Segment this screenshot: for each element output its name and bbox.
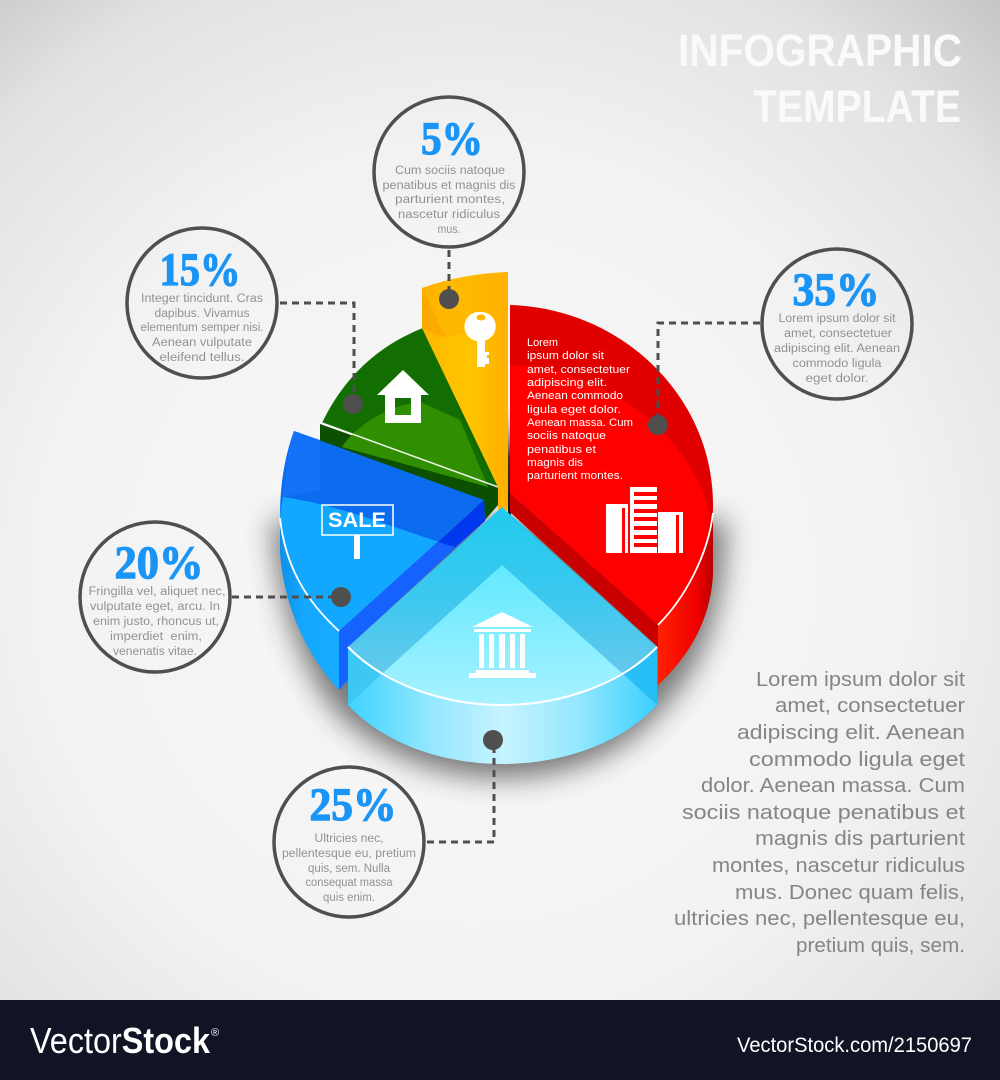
callout: 25%: pellentesque eu, pretium xyxy=(282,848,416,860)
icon: key xyxy=(464,312,496,367)
marker dots xyxy=(331,289,668,750)
red slice text: sociis natoque xyxy=(527,430,606,442)
callout: 5%: Cum sociis natoque xyxy=(395,165,505,177)
body text block: dolor. Aenean massa. Cum xyxy=(701,775,965,797)
title: INFOGRAPHIC xyxy=(678,25,962,76)
pie shadow xyxy=(272,520,726,778)
red slice text: magnis dis xyxy=(527,457,584,469)
icon: sale sign xyxy=(322,505,393,559)
title xyxy=(678,25,962,132)
callout: 15%: Aenean vulputate xyxy=(152,337,252,349)
callout: 5%: penatibus et magnis dis xyxy=(382,180,516,192)
callout: 35% xyxy=(762,249,912,399)
red slice text: ipsum dolor sit xyxy=(527,350,604,362)
callout: 25%: quis enim. xyxy=(323,892,375,904)
icon: buildings xyxy=(606,487,683,553)
body text block: adipiscing elit. Aenean xyxy=(737,722,965,744)
body text block: magnis dis parturient xyxy=(755,828,965,850)
callout: 20%: enim justo, rhoncus ut, xyxy=(93,616,219,628)
red slice text: adipiscing elit. xyxy=(527,377,607,389)
body text block: amet, consectetuer xyxy=(775,695,965,717)
icon: bank xyxy=(469,612,536,678)
callout: 20%: vulputate eget, arcu. In xyxy=(90,601,220,613)
slice: green 15% xyxy=(320,328,498,520)
callout: 25%: Ultricies nec, xyxy=(314,833,384,845)
callout: 15%: dapibus. Vivamus xyxy=(154,308,250,320)
slice: cyan 25% xyxy=(348,507,657,764)
callout: 5%: parturient montes, xyxy=(395,194,505,206)
callout: 15% xyxy=(127,228,277,378)
red slice text: Aenean commodo xyxy=(527,390,623,402)
callout: 25%: consequat massa xyxy=(306,877,393,889)
body text block: ultricies nec, pellentesque eu, xyxy=(674,908,965,930)
callout: 20%: venenatis vitae. xyxy=(113,646,197,658)
callout: 5% xyxy=(374,97,524,247)
callout: 5%: 5% xyxy=(421,113,483,165)
body text block: Lorem ipsum dolor sit xyxy=(756,669,965,691)
callout: 25%: 25% xyxy=(310,779,396,831)
body text block: montes, nascetur ridiculus xyxy=(712,855,965,877)
footer bar: VectorStock xyxy=(30,1020,211,1061)
callout: 15%: eleifend tellus. xyxy=(160,352,244,364)
body text block xyxy=(674,669,966,957)
callout: 15%: Integer tincidunt. Cras xyxy=(141,293,263,305)
pie chart xyxy=(280,272,713,764)
callout: 35%: eget dolor. xyxy=(806,373,868,385)
red slice text: amet, consectetuer xyxy=(527,364,630,376)
body text block: pretium quis, sem. xyxy=(796,935,965,957)
footer bar: ® xyxy=(211,1027,219,1039)
callout: 35%: commodo ligula xyxy=(792,358,882,370)
connector lines xyxy=(232,250,760,842)
callout: 25% xyxy=(274,767,424,917)
red slice text: penatibus et xyxy=(527,444,596,456)
red slice text: Lorem xyxy=(527,337,558,349)
callout: 25%: quis, sem. Nulla xyxy=(308,863,391,875)
callout: 35%: adipiscing elit. Aenean xyxy=(774,343,900,355)
callout: 15%: 15% xyxy=(160,244,240,296)
red slice text: ligula eget dolor. xyxy=(527,404,621,416)
callout: 15%: elementum semper nisi. xyxy=(140,322,264,334)
callout: 35%: Lorem ipsum dolor sit xyxy=(778,313,896,325)
slice: yellow 5% xyxy=(422,272,508,510)
icon: house xyxy=(377,370,429,423)
footer bar: VectorStock.com/2150697 xyxy=(737,1034,972,1057)
callout: 20%: 20% xyxy=(114,537,204,589)
callout: 20%: Fringilla vel, aliquet nec, xyxy=(88,586,226,598)
body text block: mus. Donec quam felis, xyxy=(735,882,965,904)
callout: 20%: imperdiet enim, xyxy=(110,631,202,643)
callout: 35%: 35% xyxy=(792,264,880,316)
icon: sale sign: SALE xyxy=(328,509,386,532)
body text block: commodo ligula eget xyxy=(749,749,966,771)
title: TEMPLATE xyxy=(753,81,961,132)
red slice text: Aenean massa. Cum xyxy=(527,417,633,429)
red slice text: parturient montes. xyxy=(527,470,623,482)
footer bar xyxy=(0,1000,1000,1080)
callout: 35%: amet, consectetuer xyxy=(784,328,892,340)
callout: 20% xyxy=(80,522,230,672)
red slice text xyxy=(527,337,633,482)
slice: blue 20% xyxy=(280,431,485,690)
slice: red 35% xyxy=(508,305,713,685)
callout: 5%: nascetur ridiculus xyxy=(398,209,500,221)
callout: 5%: mus. xyxy=(438,224,460,236)
body text block: sociis natoque penatibus et xyxy=(682,802,966,824)
